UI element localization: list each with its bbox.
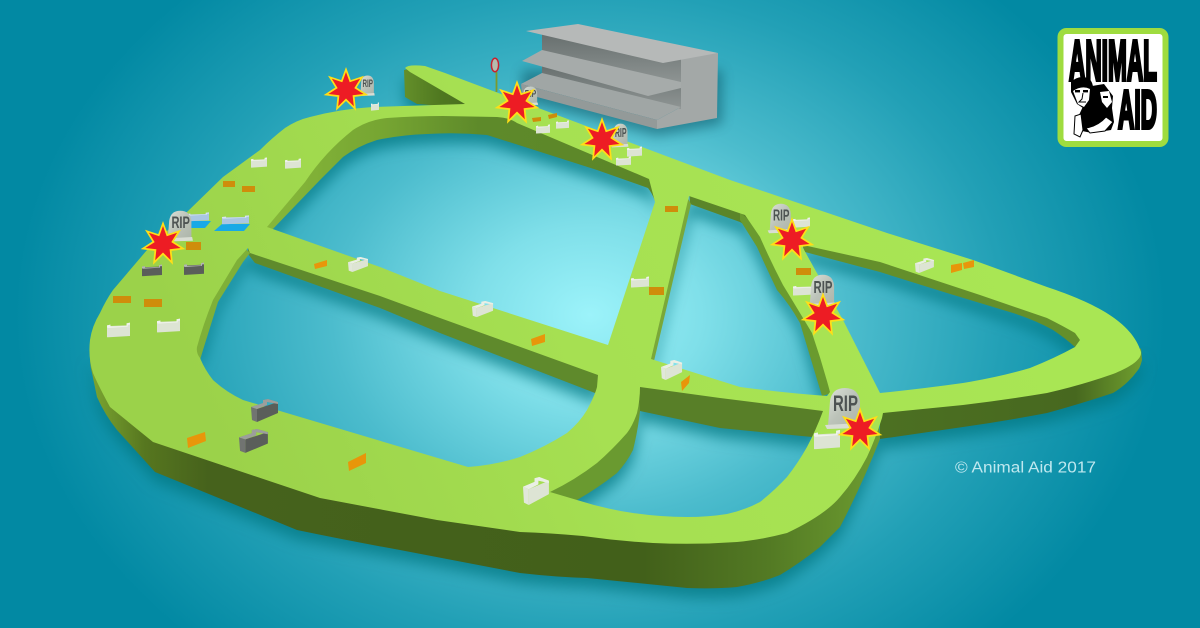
white fence at final junction bbox=[814, 430, 840, 449]
tombstone 1 bbox=[359, 76, 375, 96]
roof bbox=[526, 24, 718, 63]
tombstone 6 bbox=[807, 275, 836, 307]
tombstone 2 bbox=[521, 86, 538, 105]
tombstone 4: RIP bbox=[171, 213, 190, 232]
copyright credit: © Animal Aid 2017 bbox=[955, 460, 1096, 476]
icon: course sign post bbox=[491, 58, 499, 92]
lower tier bbox=[521, 73, 681, 120]
tombstone 4 bbox=[166, 211, 193, 242]
logo monkey illustration bbox=[1071, 77, 1114, 137]
tombstone 7 bbox=[825, 388, 862, 429]
grandstand shadow bbox=[522, 70, 722, 136]
stand base front bbox=[521, 84, 657, 129]
track top surface bbox=[89, 65, 1141, 544]
tombstone 7: RIP bbox=[833, 391, 858, 416]
starburst markers bbox=[141, 67, 882, 451]
racetrack shadow bbox=[90, 78, 1142, 598]
tombstone 6: RIP bbox=[814, 279, 833, 298]
tombstone 3 bbox=[611, 124, 628, 147]
white fences bbox=[107, 102, 934, 505]
track side walls bbox=[90, 68, 1142, 588]
middle tier bbox=[522, 50, 681, 96]
tombstone 5 bbox=[768, 204, 792, 233]
tombstone 2: RIP bbox=[525, 88, 536, 99]
orange fence markers bbox=[113, 113, 974, 471]
tombstone 5: RIP bbox=[773, 206, 790, 224]
logo frame bbox=[1060, 31, 1166, 144]
water jumps bbox=[187, 212, 250, 231]
tombstone 3: RIP bbox=[615, 127, 627, 141]
Animal Aid logo bbox=[1060, 29, 1166, 144]
lower recess bbox=[542, 64, 681, 109]
tombstone 1: RIP bbox=[363, 77, 373, 89]
racetrack: green 3D course bbox=[89, 65, 1142, 588]
grandstand building bbox=[521, 24, 718, 129]
dark fences bbox=[142, 263, 278, 453]
stand right end panel bbox=[657, 53, 718, 129]
upper recess bbox=[542, 32, 681, 84]
